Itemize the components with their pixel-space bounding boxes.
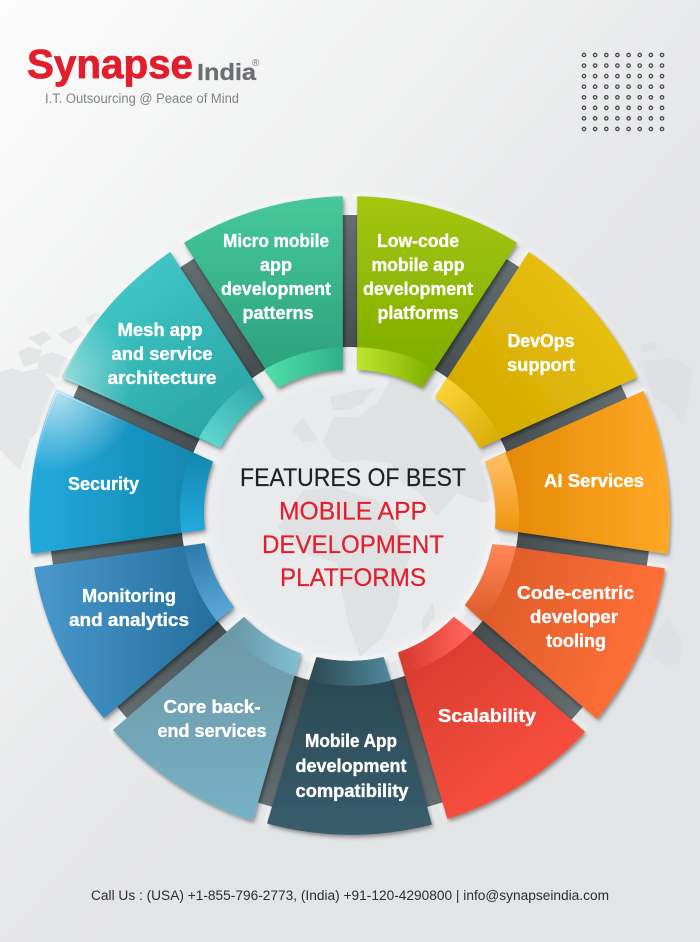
segment: Low-code mobile app development platforms: development: [363, 279, 473, 299]
segment: AI Services: [486, 392, 669, 553]
segment: Mobile App development compatibility: development: [296, 756, 406, 776]
segment: Micro mobile app development patterns: [185, 197, 342, 387]
segment: Core back-end services: end services: [158, 721, 266, 741]
segment: Low-code mobile app development platforms: platforms: [378, 303, 458, 323]
segment: Low-code mobile app development platforms: Low-code: [377, 231, 459, 251]
segment: Code-centric developer tooling: [466, 545, 664, 718]
segment: DevOps support: DevOps: [508, 331, 574, 351]
logo tagline: I.T. Outsourcing @ Peace of Mind: [45, 91, 239, 106]
segment: Monitoring and analytics: [35, 544, 233, 717]
segment: Code-centric developer tooling: tooling: [546, 631, 606, 651]
title: [240, 464, 466, 592]
segment: Scalability: [399, 618, 584, 818]
segment: Mobile App development compatibility: Mobile App: [305, 731, 397, 751]
logo wordmark India: India: [197, 59, 257, 85]
segment: Security: Security: [68, 474, 139, 494]
dark connector ring: [49, 215, 651, 817]
segment: Micro mobile app development patterns: app: [260, 255, 292, 275]
title: DEVELOPMENT: [262, 531, 444, 559]
segment: AI Services: AI Services: [544, 471, 644, 491]
centre disc: [198, 364, 502, 668]
registered mark: ®: [252, 58, 260, 69]
light halo around the wheel: [30, 197, 669, 834]
segment: Mesh app and service architecture: and service: [112, 344, 212, 364]
logo: [27, 41, 260, 106]
segment: Security: [30, 391, 212, 553]
segment: Mesh app and service architecture: Mesh app: [118, 320, 203, 340]
segment: Micro mobile app development patterns: development: [221, 279, 331, 299]
segment: Mobile App development compatibility: [268, 658, 431, 834]
segment: Low-code mobile app development platforms: mobile app: [372, 255, 464, 275]
segment: Low-code mobile app development platforms: [358, 197, 516, 387]
segment: Scalability: Scalability: [438, 706, 536, 726]
world map backdrop: [0, 312, 692, 668]
segment: Micro mobile app development patterns: Micro mobile: [223, 231, 329, 251]
segment: Monitoring and analytics: and analytics: [69, 610, 189, 630]
segment: Mesh app and service architecture: architecture: [108, 368, 216, 388]
segment: DevOps support: support: [507, 355, 575, 375]
segment: Micro mobile app development patterns: patterns: [242, 303, 314, 323]
segment: DevOps support: [436, 253, 636, 447]
dot grid decoration: [582, 53, 664, 131]
title: FEATURES OF BEST: [240, 464, 466, 492]
map: Europe, Asia and Africa: [278, 380, 510, 657]
segment: Mesh app and service architecture: [63, 253, 263, 447]
footer contact line: Call Us : (USA) +1-855-796-2773, (India) +91-120-4290800 | info@synapseindia.com: [91, 888, 609, 903]
map: outer landmasses: [0, 312, 692, 668]
segment: Mobile App development compatibility: compatibility: [296, 781, 408, 801]
logo wordmark Synapse: Synapse: [27, 41, 193, 87]
segment: Code-centric developer tooling: developer: [530, 607, 618, 627]
segment: Monitoring and analytics: Monitoring: [82, 586, 176, 606]
title: PLATFORMS: [280, 564, 426, 592]
segment: Core back-end services: [114, 618, 300, 820]
segment: Code-centric developer tooling: Code-centric: [517, 583, 634, 603]
segment: Core back-end services: Core back-: [164, 697, 260, 717]
title: MOBILE APP: [279, 498, 427, 526]
